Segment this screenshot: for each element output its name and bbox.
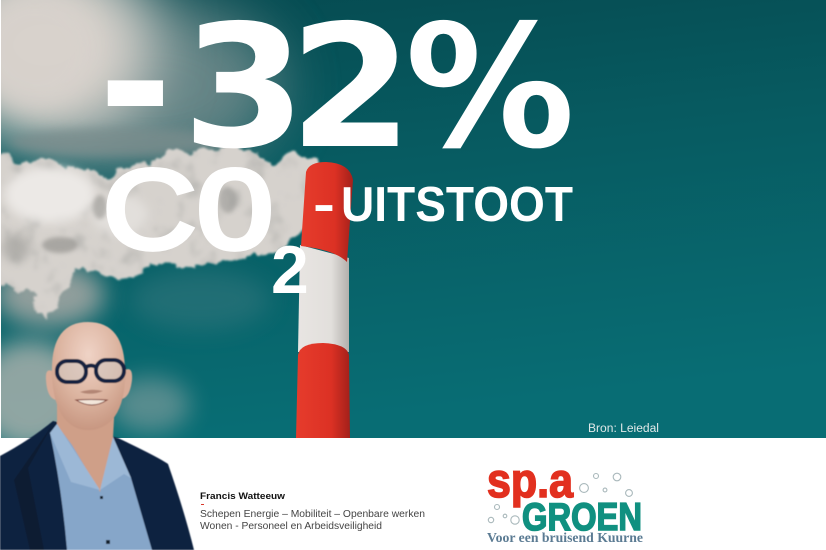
subheading: CO2 (103, 147, 309, 308)
shirt (50, 424, 152, 550)
glasses (57, 360, 124, 382)
subheading: CO2: 0 (197, 147, 273, 272)
smile (76, 400, 107, 405)
subheading: CO2: C (103, 147, 196, 272)
nose shadow (80, 390, 103, 394)
upper left smoke haze (0, 0, 280, 170)
chimney lower red band (296, 343, 350, 438)
role line two: Wonen - Personeel en Arbeidsveiligheid (200, 521, 382, 532)
logo tagline: Voor een bruisend Kuurne (487, 530, 643, 545)
subheading: uitstoot: - (313, 178, 335, 232)
lower left smoke haze (0, 263, 270, 450)
head (52, 322, 125, 430)
neck (57, 395, 115, 492)
jacket lapel shadow (14, 424, 53, 550)
name: Francis Watteeuw (200, 491, 286, 502)
caption: name and roles (200, 491, 425, 532)
shirt buttons (100, 496, 110, 544)
logo bubbles (488, 473, 632, 524)
main smoke plume (0, 147, 318, 318)
source credit: Bron: Leiedal (588, 423, 659, 435)
chimney upper red band (301, 162, 353, 262)
logo wordmark sp.a: sp.a (487, 455, 573, 508)
portrait: Francis Watteeuw (0, 322, 194, 550)
smoke highlights and shadows (2, 167, 237, 262)
jacket (0, 421, 194, 550)
subheading: uitstoot: UITSTOOT (341, 178, 573, 232)
ears (46, 369, 132, 400)
role line one: Schepen Energie – Mobiliteit – Openbare werken (200, 509, 425, 520)
shirt collar (50, 424, 131, 490)
logo: sp.a Groen (487, 455, 643, 545)
logo wordmark GROEN: GROEN (522, 496, 642, 539)
red dash (201, 504, 204, 505)
chimney (296, 162, 353, 438)
chimney white band (298, 245, 349, 352)
subheading: CO2: 2 (271, 232, 309, 308)
headline: -32% (98, 0, 575, 188)
